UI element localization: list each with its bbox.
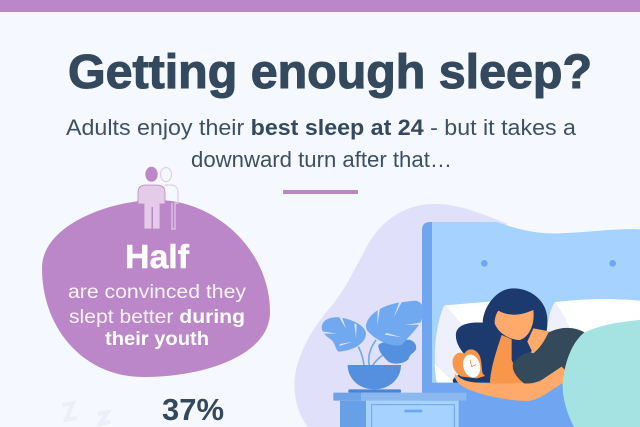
callout text: are convinced they	[68, 282, 247, 303]
panel: half callout	[42, 167, 270, 377]
right pillow	[547, 299, 640, 340]
subtitle: Adults enjoy their best sleep at 24 - but it takes a	[66, 115, 577, 140]
callout text	[68, 282, 247, 350]
icon: two people	[138, 167, 178, 229]
top bar	[0, 0, 640, 12]
leaves	[322, 317, 366, 352]
lilac background shape	[294, 204, 507, 427]
mattress	[422, 383, 640, 427]
pot	[348, 365, 401, 389]
subtitle	[66, 115, 577, 172]
callout text: slept better during	[69, 307, 245, 328]
nightstand	[333, 393, 466, 427]
forearm under chin	[490, 335, 524, 384]
leaf cuts	[322, 317, 357, 346]
heading: half: Half	[125, 238, 190, 275]
alarm clock	[452, 349, 485, 379]
divider	[283, 190, 358, 194]
title: Getting enough sleep?	[68, 46, 592, 99]
headboard	[430, 222, 640, 387]
blanket	[563, 320, 640, 427]
pot base	[348, 389, 401, 393]
plant	[322, 301, 423, 393]
shirt	[513, 328, 585, 384]
hair	[453, 288, 547, 383]
headboard side	[422, 222, 432, 387]
statistic: 37%: 37%	[162, 392, 224, 427]
icon: faint zzz	[62, 403, 110, 424]
arm	[455, 363, 565, 401]
purple blob	[42, 200, 270, 377]
subtitle: downward turn after that…	[191, 147, 452, 172]
left pillow	[435, 302, 490, 383]
callout text: their youth	[105, 329, 209, 350]
neck and chest	[527, 328, 551, 354]
illustration: woman in bed with alarm clock	[294, 204, 640, 427]
stems	[358, 340, 383, 365]
headboard buttons	[481, 260, 488, 267]
face	[495, 310, 534, 340]
